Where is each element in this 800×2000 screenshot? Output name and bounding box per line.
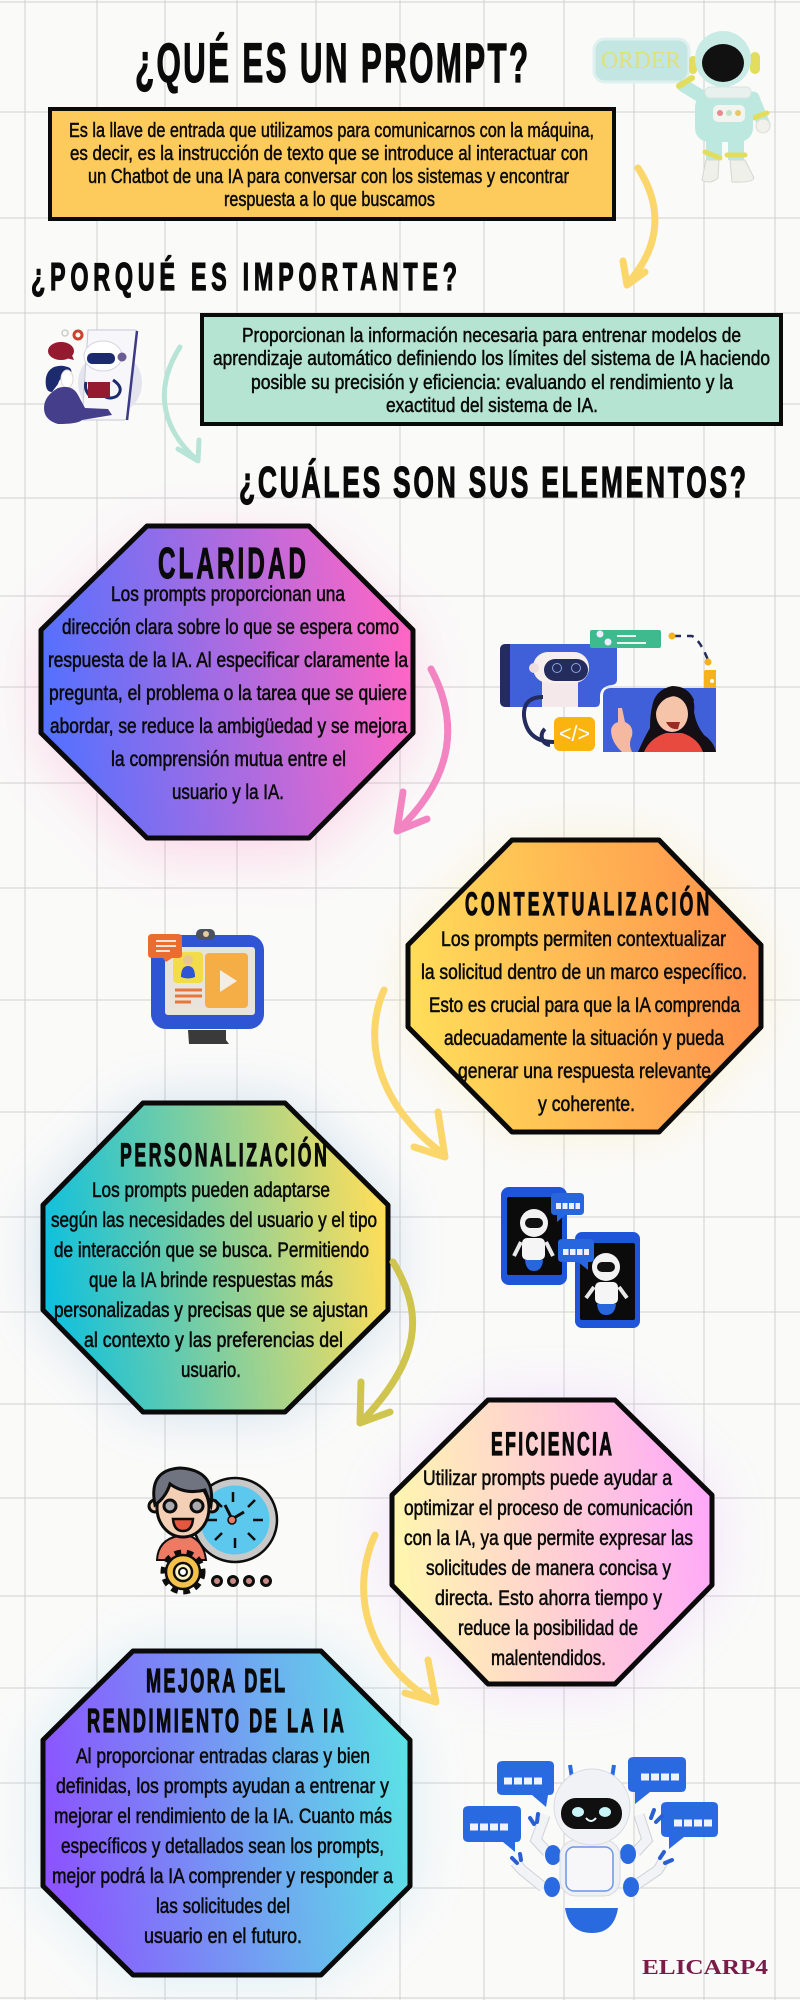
- heading: mejora del rendimiento: [87, 1662, 344, 1739]
- text: claridad: respuesta de la IA. Al especificar claramente la: [48, 649, 408, 672]
- text: eficiencia: optimizar el proceso de comunicación: [404, 1497, 693, 1520]
- arrow: pink: [397, 669, 448, 831]
- icon: robot with chat bubbles: [463, 1757, 718, 1933]
- panel: mejora del rendimiento: [43, 1651, 410, 1975]
- text: contextualización: Los prompts permiten contextualizar: [441, 928, 726, 951]
- definition text: Es la llave de entrada que utilizamos para comunicarnos con la máquina,: [69, 120, 594, 142]
- text: mejora del rendimiento: Al proporcionar entradas claras y bien: [76, 1745, 370, 1768]
- title: ¿QUÉ ES UN PROMPT?: [135, 31, 528, 94]
- text: personalización: Los prompts pueden adaptarse: [92, 1179, 330, 1202]
- text: claridad: usuario y la IA.: [172, 781, 284, 804]
- definition text: [69, 120, 594, 211]
- icon: robot and woman video panels: </>: [559, 721, 590, 746]
- heading: mejora del rendimiento: MEJORA DEL: [146, 1662, 285, 1699]
- text: eficiencia: reduce la posibilidad de: [458, 1617, 638, 1640]
- arrow: yellow to personalización: [375, 990, 445, 1157]
- text: claridad: pregunta, el problema o la tarea que se quiere: [49, 682, 407, 705]
- text: eficiencia: Utilizar prompts puede ayudar a: [423, 1467, 672, 1490]
- text: contextualización: generar una respuesta relevante: [458, 1060, 711, 1083]
- icon: woman with robot tablet: [44, 330, 142, 424]
- text: personalización: según las necesidades del usuario y el tipo: [51, 1209, 377, 1232]
- signature: ELICARP4: [642, 1955, 769, 1979]
- heading: eficiencia: EFICIENCIA: [491, 1428, 612, 1462]
- heading: elements: ¿CUÁLES SON SUS ELEMENTOS?: [239, 457, 746, 507]
- icon: robot and woman video panels: [500, 630, 716, 752]
- icon: astronaut with ORDER sign: [594, 31, 770, 182]
- text: contextualización: adecuadamente la situación y pueda: [444, 1027, 724, 1050]
- text: contextualización: y coherente.: [538, 1093, 635, 1116]
- text: mejora del rendimiento: las solicitudes del: [156, 1895, 290, 1918]
- text: mejora del rendimiento: mejor podrá la IA comprender y responder a: [52, 1865, 393, 1888]
- arrow: yellow to section two: [623, 168, 655, 285]
- definition text: respuesta a lo que buscamos: [224, 189, 435, 211]
- arrow: yellow to mejora: [364, 1535, 436, 1702]
- text: mejora del rendimiento: usuario en el futuro.: [144, 1925, 302, 1948]
- icon: monitor with video: [148, 929, 264, 1044]
- text: personalización: personalizadas y precisas que se ajustan: [54, 1299, 368, 1322]
- text: personalización: de interacción que se busca. Permitiendo: [54, 1239, 369, 1262]
- panel: eficiencia: [392, 1400, 712, 1684]
- panel: what is a prompt: [50, 109, 614, 219]
- text: contextualización: [421, 928, 747, 1116]
- explanation text: [213, 325, 770, 417]
- text: claridad: [48, 583, 408, 804]
- icon: two phones with robots: [501, 1187, 640, 1328]
- text: eficiencia: con la IA, ya que permite expresar las: [404, 1527, 693, 1550]
- panel: claridad: [41, 526, 413, 838]
- definition text: es decir, es la instrucción de texto que se introduce al interactuar con: [70, 143, 588, 165]
- icon: man with clock and gear: [149, 1468, 277, 1590]
- explanation text: posible su precisión y eficiencia: evaluando el rendimiento y la: [251, 372, 734, 394]
- text: claridad: Los prompts proporcionan una: [111, 583, 345, 606]
- arrow: teal to elements: [164, 347, 199, 461]
- panel: contextualización: [408, 840, 761, 1132]
- text: personalización: que la IA brinde respuestas más: [89, 1269, 333, 1292]
- heading: claridad: CLARIDAD: [158, 538, 306, 588]
- text: mejora del rendimiento: [52, 1745, 393, 1948]
- text: eficiencia: [404, 1467, 693, 1670]
- definition text: un Chatbot de una IA para conversar con los sistemas y encontrar: [88, 166, 569, 188]
- heading: contextualización: CONTEXTUALIZACIÓN: [465, 885, 709, 922]
- text: personalización: usuario.: [181, 1359, 241, 1382]
- heading: mejora del rendimiento: RENDIMIENTO DE LA IA: [87, 1702, 344, 1739]
- text: mejora del rendimiento: mejorar el rendimiento de la IA. Cuanto más: [54, 1805, 392, 1828]
- icon: astronaut with ORDER sign: ORDER: [601, 48, 681, 74]
- panel: why it matters: [202, 315, 781, 424]
- heading: personalización: PERSONALIZACIÓN: [120, 1136, 327, 1173]
- heading: why it matters: ¿PORQUÉ ES IMPORTANTE?: [31, 255, 457, 298]
- panel: personalización: [43, 1103, 388, 1412]
- text: claridad: la comprensión mutua entre el: [111, 748, 346, 771]
- text: personalización: [51, 1179, 377, 1382]
- arrow: olive to eficiencia: [360, 1262, 413, 1423]
- text: personalización: al contexto y las preferencias del: [84, 1329, 343, 1352]
- text: claridad: abordar, se reduce la ambigüedad y se mejora: [50, 715, 407, 738]
- text: mejora del rendimiento: definidas, los prompts ayudan a entrenar y: [56, 1775, 389, 1798]
- text: eficiencia: directa. Esto ahorra tiempo y: [435, 1587, 662, 1610]
- text: claridad: dirección clara sobre lo que se espera como: [62, 616, 399, 639]
- text: mejora del rendimiento: específicos y detallados sean los prompts,: [61, 1835, 384, 1858]
- text: eficiencia: solicitudes de manera concisa y: [426, 1557, 671, 1580]
- explanation text: exactitud del sistema de IA.: [386, 395, 598, 417]
- text: eficiencia: malentendidos.: [491, 1647, 606, 1670]
